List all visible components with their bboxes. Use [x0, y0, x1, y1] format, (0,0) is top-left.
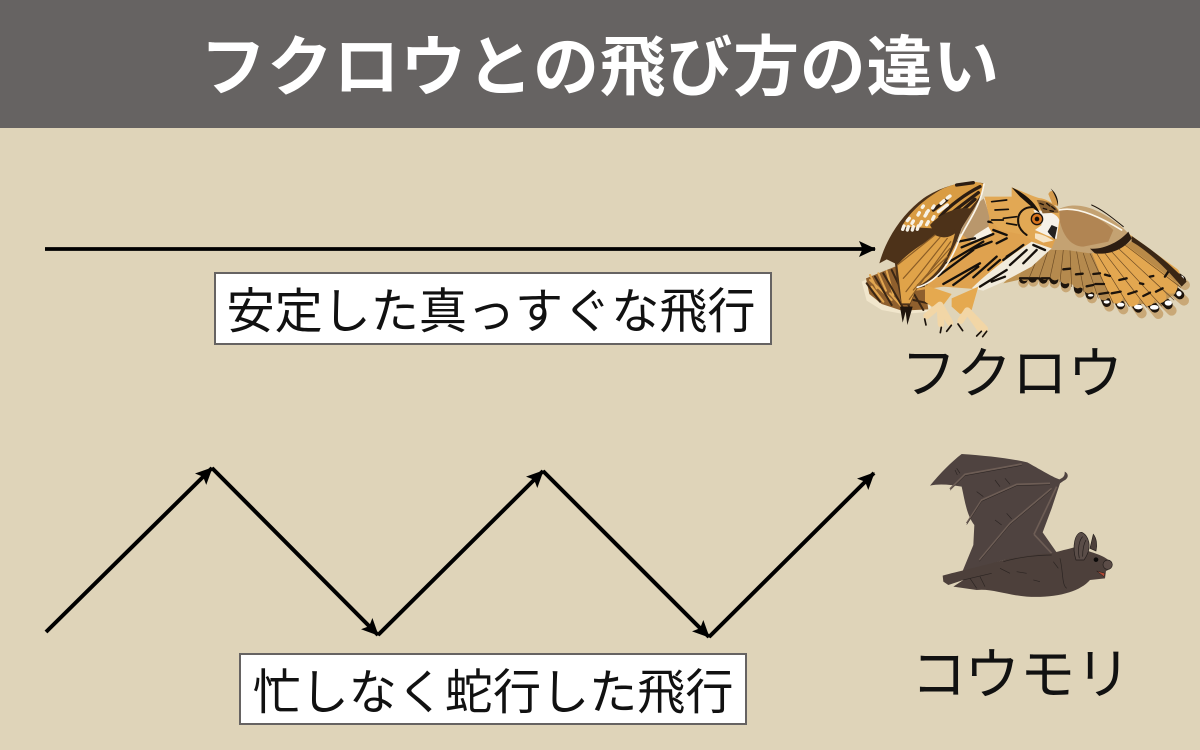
beak — [1048, 225, 1057, 239]
right wing coverts — [1047, 206, 1132, 253]
bat ears — [1074, 532, 1089, 560]
header band — [0, 0, 1200, 128]
title: フクロウとの飛び方の違い — [200, 30, 1000, 104]
tail — [862, 267, 932, 314]
bat face — [1094, 557, 1098, 562]
right wing feather shadow — [1023, 240, 1185, 314]
label: owl: フクロウ — [901, 343, 1123, 405]
bat wing membrane — [930, 454, 1068, 573]
head — [984, 187, 1060, 243]
talons — [925, 319, 987, 337]
left wing white spots — [903, 196, 950, 230]
callout: owl flight: 安定した真っすぐな飛行 — [226, 285, 756, 339]
legs — [925, 285, 952, 307]
callout: bat flight: 忙しなく蛇行した飛行 — [253, 666, 733, 720]
arrow: straight owl flight — [45, 247, 875, 251]
icon: owl — [862, 182, 1187, 337]
right wing gold feathers — [1093, 240, 1173, 300]
label: bat: コウモリ — [911, 644, 1131, 706]
right wing feather tips — [1023, 240, 1182, 308]
toes — [927, 305, 950, 324]
eye — [1031, 213, 1043, 225]
bat body — [943, 547, 1112, 597]
left wing — [879, 182, 984, 305]
right wing base fill — [1003, 240, 1182, 304]
right wing white tips — [1088, 276, 1184, 310]
right wing feather lines and bars — [1028, 245, 1181, 307]
body — [910, 198, 1060, 292]
arrow: zigzag bat flight — [46, 468, 874, 637]
icon: bat — [930, 454, 1112, 597]
bat wing bones — [950, 464, 1057, 560]
